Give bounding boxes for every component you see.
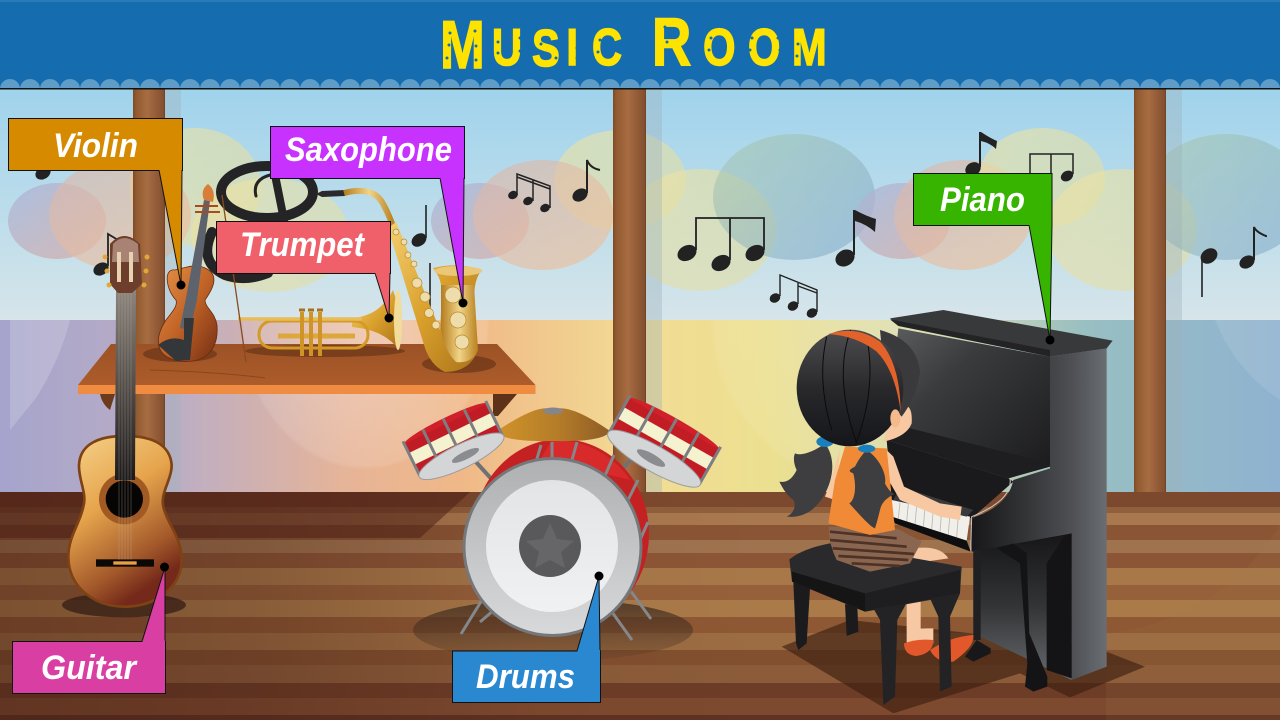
label: Trumpet: Trumpet xyxy=(240,226,366,264)
piano upper front xyxy=(887,328,1050,478)
note: small triple beamed xyxy=(507,174,551,214)
sax bell xyxy=(434,266,482,276)
bass drum head xyxy=(464,458,641,636)
piano keys xyxy=(892,500,970,541)
girl legs xyxy=(907,602,933,643)
title: R xyxy=(652,4,691,80)
note: large triple beamed xyxy=(675,218,767,274)
music notes xyxy=(33,132,1266,322)
label: Drums xyxy=(452,572,604,702)
sax mouthpiece xyxy=(316,190,345,197)
sax keys xyxy=(393,229,469,349)
drum hub xyxy=(519,515,581,577)
guitar bridge xyxy=(96,559,154,567)
guitar body xyxy=(68,436,182,607)
window background xyxy=(0,88,1280,492)
bow xyxy=(222,195,246,362)
sax body xyxy=(388,222,482,372)
girl xyxy=(779,330,973,705)
bench xyxy=(789,543,962,612)
girl shoes xyxy=(904,640,933,656)
label: Piano: Piano xyxy=(940,181,1025,219)
violin body xyxy=(158,266,217,361)
sax neck xyxy=(344,191,394,230)
label: Saxophone: Saxophone xyxy=(285,131,452,169)
left tom xyxy=(401,398,509,488)
note: stem down xyxy=(1198,245,1220,297)
note: single flag xyxy=(570,160,600,204)
guitar xyxy=(62,436,186,617)
piano and girl xyxy=(779,310,1145,713)
piano case xyxy=(971,348,1107,680)
label: Guitar: Guitar xyxy=(41,649,138,687)
cymbal xyxy=(497,408,610,441)
bass drum shell xyxy=(473,439,649,629)
note: double flag xyxy=(832,210,876,270)
table xyxy=(78,344,536,416)
piano keyboard recess xyxy=(887,440,1013,518)
piano lower back panel xyxy=(973,533,1072,680)
floor shadow xyxy=(782,620,1145,713)
piano lid xyxy=(890,310,1113,357)
note: beamed pair xyxy=(1030,154,1075,184)
trumpet tubing xyxy=(259,321,368,348)
background bubbles xyxy=(8,128,1280,292)
drum set xyxy=(401,393,723,661)
guitar neck and head xyxy=(102,236,150,560)
violin scroll and pegs xyxy=(203,184,214,202)
drum shadow xyxy=(413,599,693,661)
note: top flag xyxy=(963,132,997,179)
girl hair xyxy=(880,330,920,417)
title: OOM xyxy=(703,18,827,76)
girl top xyxy=(828,447,895,535)
label: Piano xyxy=(914,174,1054,344)
note: small triple beamed centre xyxy=(768,275,819,320)
trumpet bell xyxy=(352,290,401,350)
piano body xyxy=(887,310,1113,692)
label: Guitar xyxy=(12,562,169,694)
label: Saxophone xyxy=(270,126,468,308)
violin xyxy=(143,184,246,362)
guitar shadow xyxy=(62,593,186,617)
title: M xyxy=(440,7,485,83)
girl pigtails xyxy=(779,443,832,517)
girl ear xyxy=(890,409,900,427)
label: Trumpet xyxy=(216,222,394,322)
piano legs xyxy=(997,533,1072,692)
girl headband xyxy=(828,331,901,412)
note: right flag xyxy=(1237,227,1266,271)
note: behind saxophone xyxy=(409,205,430,322)
label: Drums: Drums xyxy=(476,658,575,696)
treble clef xyxy=(207,166,313,278)
note: by violin label xyxy=(33,164,118,278)
label: Violin xyxy=(8,118,186,290)
header banner xyxy=(0,0,1280,99)
right tom xyxy=(602,393,723,496)
guitar soundhole xyxy=(99,474,150,524)
girl skirt xyxy=(829,527,922,572)
title: USIC xyxy=(492,18,622,77)
drum stands xyxy=(461,590,651,640)
trumpet xyxy=(238,290,405,357)
title xyxy=(440,4,830,83)
girl ties xyxy=(816,436,834,447)
window pillars xyxy=(133,88,1182,492)
girl arm xyxy=(885,448,962,520)
saxophone xyxy=(316,190,496,373)
wooden floor xyxy=(0,492,1280,720)
label: Violin: Violin xyxy=(53,127,138,165)
bench legs xyxy=(793,582,810,650)
girl face side xyxy=(883,406,912,442)
